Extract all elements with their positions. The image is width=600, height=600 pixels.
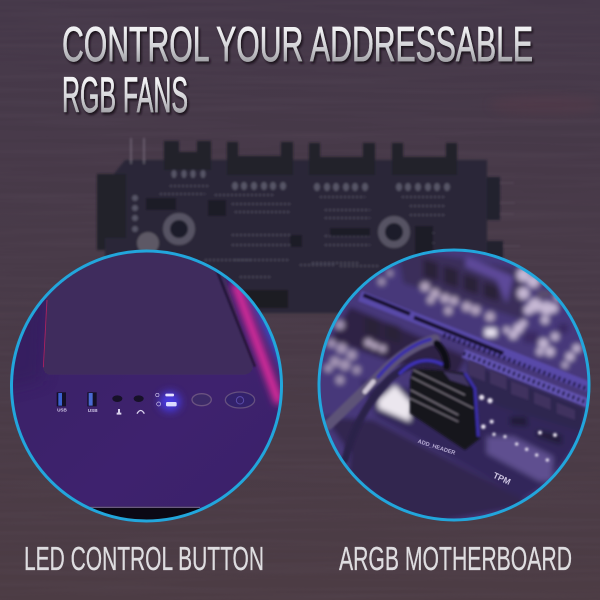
motherboard base <box>320 252 588 518</box>
dark case edge <box>14 320 37 380</box>
blurred photo content <box>320 252 588 518</box>
board body <box>105 160 487 313</box>
left connector <box>97 174 126 250</box>
ARGB connector <box>410 368 480 450</box>
TPM silk label: TPM <box>491 470 512 487</box>
right side pins <box>500 183 520 246</box>
case surface <box>13 278 280 508</box>
connector pins <box>132 170 450 232</box>
top left pins <box>131 138 144 164</box>
right side connectors <box>487 177 503 258</box>
circuit board controller <box>97 138 520 313</box>
RGB light strip <box>226 281 280 409</box>
PCIe slot 1 <box>360 296 588 387</box>
mesh grille <box>43 247 253 375</box>
header pins TPM <box>479 395 557 462</box>
top pin header <box>164 141 211 170</box>
panel: LED control button photo <box>10 250 283 522</box>
power button <box>225 392 255 408</box>
beige capacitors <box>364 282 495 352</box>
LED button <box>192 394 211 406</box>
slot blocks <box>468 360 575 420</box>
bright components upper right <box>485 268 581 368</box>
ARGB header silk label: ADD_HEADER <box>417 439 456 457</box>
title <box>62 18 533 123</box>
dark upper components <box>397 247 523 320</box>
audio jacks <box>112 395 144 414</box>
dark chips <box>146 198 433 254</box>
mounting holes <box>166 216 406 244</box>
case bottom edge <box>90 506 200 520</box>
silkscreen text rows <box>160 186 445 277</box>
title: RGB FANS <box>62 67 188 123</box>
PCIe slots <box>360 295 588 403</box>
left components <box>324 270 393 384</box>
pink grille edge <box>43 300 47 367</box>
small chips <box>510 417 562 445</box>
dark chips among components <box>523 290 568 343</box>
white ARGB socket <box>378 385 412 422</box>
top fan connectors <box>227 142 457 175</box>
panel: ARGB motherboard photo <box>318 248 590 522</box>
cables <box>328 339 447 460</box>
heatsink blocks <box>365 258 498 343</box>
header pin block <box>487 437 553 482</box>
left circle ring <box>12 251 282 521</box>
label: LED control button: LED CONTROL BUTTON <box>24 540 264 577</box>
grille groove <box>217 270 255 367</box>
purple slot arm <box>465 257 513 303</box>
dark foreground <box>323 417 523 527</box>
PCIe slot 2 <box>463 353 588 403</box>
blue LEDs <box>156 392 181 412</box>
USB ports <box>57 392 98 413</box>
lower pin row <box>240 290 288 308</box>
light round pad <box>137 232 159 254</box>
right circle ring <box>319 250 589 520</box>
lower board surface <box>360 380 587 498</box>
USB ports: USB <box>88 408 98 413</box>
USB ports: USB <box>57 408 68 413</box>
